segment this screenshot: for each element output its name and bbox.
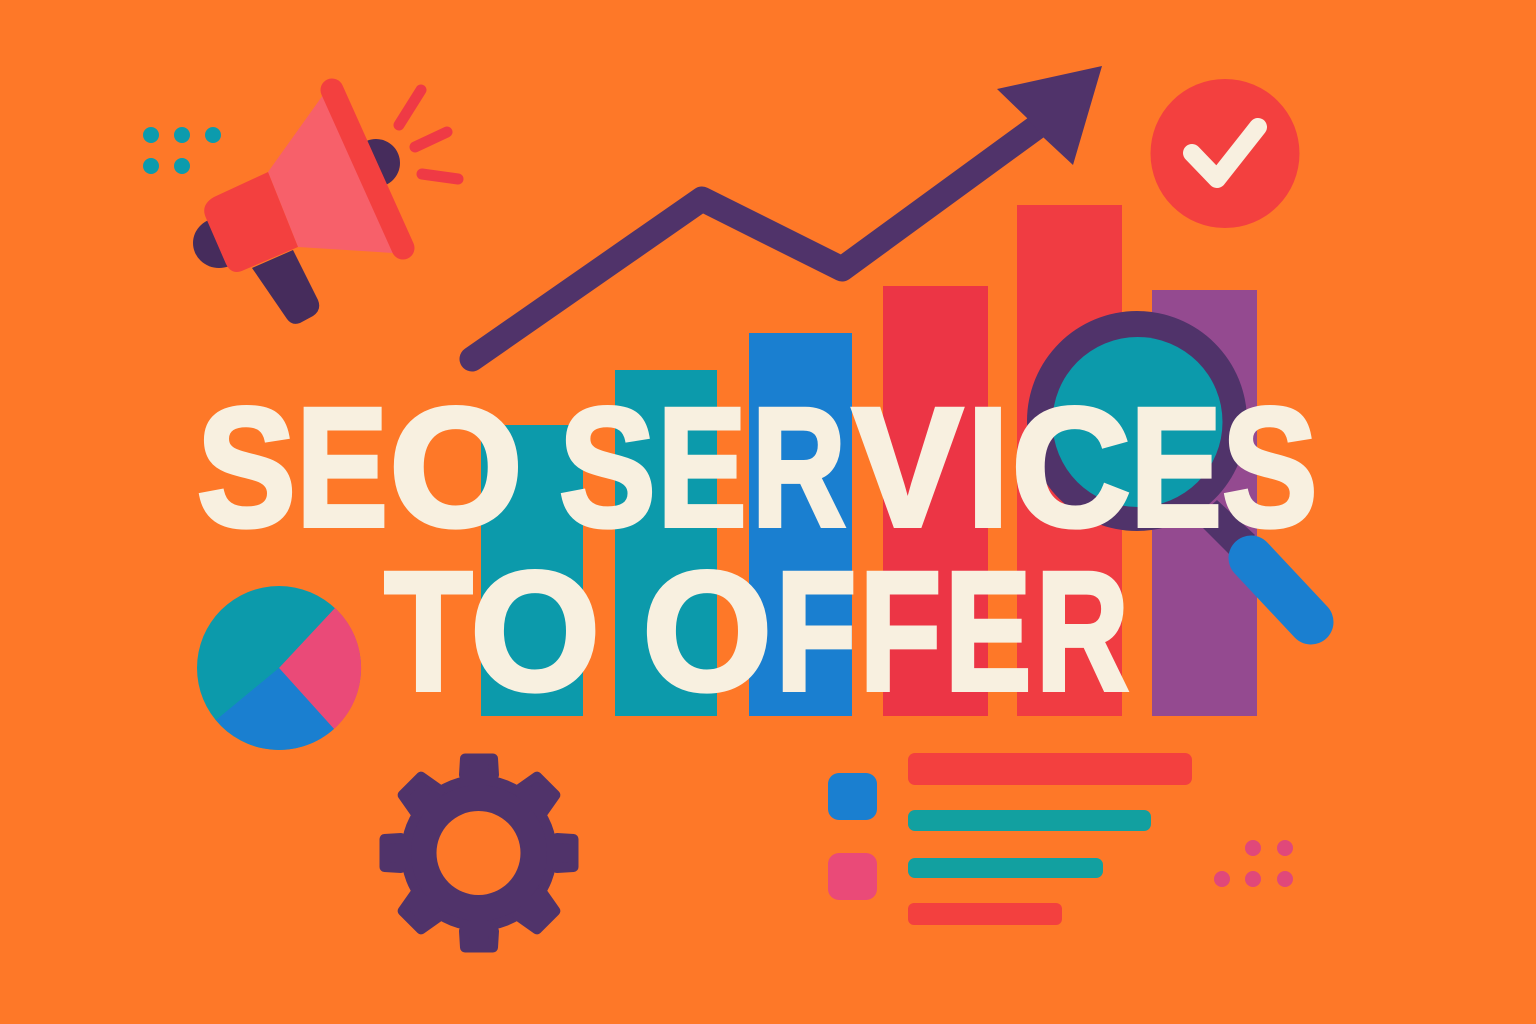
icon: gear [384, 758, 574, 948]
title: R [752, 372, 846, 562]
icon: megaphone [193, 90, 458, 324]
title: E [945, 536, 1031, 726]
icon: magnifying glass [1027, 311, 1311, 622]
title: E [658, 372, 746, 562]
title: S [197, 372, 296, 562]
arrow: growth trend [472, 66, 1102, 359]
title: I [967, 372, 1009, 562]
title: T [384, 536, 472, 726]
title: S [559, 372, 656, 562]
icon: teal dots [143, 127, 221, 174]
title [197, 372, 1317, 726]
title: O [470, 536, 600, 726]
title: V [852, 372, 962, 562]
icon: pink dots [1214, 840, 1293, 887]
list graphic [828, 753, 1192, 925]
title: R [1036, 536, 1129, 726]
title: O [642, 536, 772, 726]
title: E [296, 372, 388, 562]
bar chart [481, 205, 1257, 716]
title: C [1012, 372, 1131, 562]
icon: check badge [1150, 79, 1300, 228]
title: F [860, 536, 941, 726]
title: O [389, 372, 523, 562]
title: E [1130, 372, 1222, 562]
title: S [1222, 372, 1317, 562]
title: F [776, 536, 856, 726]
icon: pie chart [197, 586, 361, 750]
